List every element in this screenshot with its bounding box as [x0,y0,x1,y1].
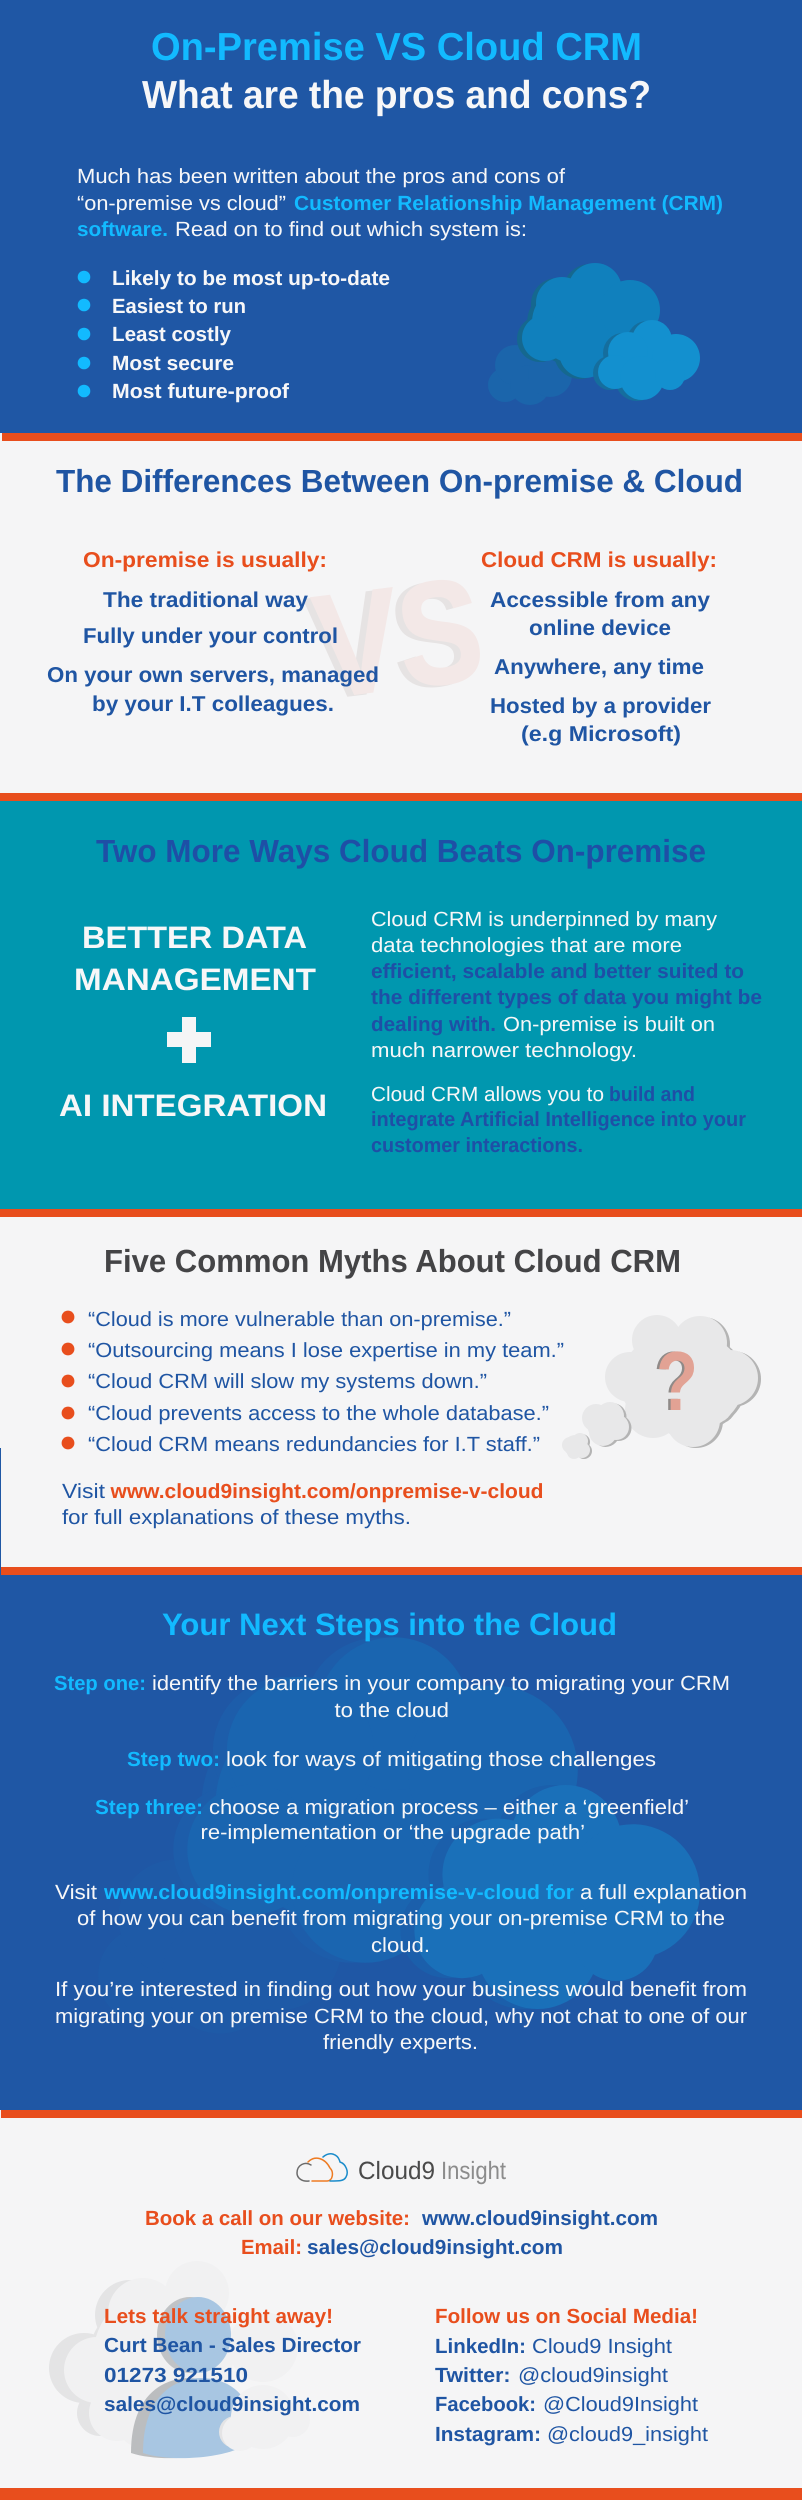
logo: Cloud9 Insight: Insight [441,2157,506,2185]
text: visit for full explanation: a full explanation [580,1881,747,1904]
text: book a call: Email: [241,2236,302,2259]
text: visit link: for full explanations of these myths. [62,1506,411,1529]
text: AI: customer interactions. [371,1134,583,1157]
text: AI: build and [609,1083,695,1106]
text: social media: Follow us on Social Media! [435,2305,698,2328]
bullet list: system qualities: Likely to be most up-to-date [112,267,390,290]
text: social media: @cloud9insight [518,2364,668,2387]
logo: Cloud9 Insight: Cloud9 [358,2157,435,2185]
text: social media: Instagram: [435,2423,541,2446]
bullet list: system qualities: Most future-proof [112,380,289,403]
heading: two more ways: Two More Ways Cloud Beats On-premise [96,833,706,869]
step two: look for ways of mitigating those challenges [226,1748,656,1771]
text: visit link: www.cloud9insight.com/onpremise-v-cloud [109,1480,543,1503]
icon: person with clouds [49,2261,310,2458]
step three: Step three: [95,1796,203,1819]
heading: differences: The Differences Between On-premise & Cloud [56,463,743,499]
column: cloud CRM: (e.g Microsoft) [521,722,681,746]
text: AI [371,1083,746,1157]
icon: thought cloud with question mark: ? [656,1334,698,1428]
column: cloud CRM: Cloud CRM is usually: [481,548,717,572]
column: on-premise: Fully under your control [83,624,338,648]
text: social media: LinkedIn: [435,2335,526,2358]
step three: choose a migration process – either a ‘greenfield’ [209,1796,689,1819]
bullet list: myths: “Cloud is more vulnerable than on-premise.” [88,1308,511,1331]
intro paragraph: Read on to find out which system is: [175,218,527,241]
column: cloud CRM [481,548,717,746]
text: social media: Twitter: [435,2364,510,2387]
text: data technologies: data technologies that are more [371,934,682,957]
column: cloud CRM: Accessible from any [490,588,710,612]
VS watermark: VS [299,548,484,730]
intro paragraph [77,165,723,241]
text: book a call [145,2207,658,2259]
bullet list: myths: “Cloud CRM means redundancies for I.T staff.” [88,1433,540,1456]
text: visit link: Visit [62,1480,105,1503]
bullet list: myths: “Cloud CRM will slow my systems down.” [88,1370,487,1393]
VS watermark: VS [306,547,491,729]
column: cloud CRM: Hosted by a provider [490,694,712,718]
text: social media: @Cloud9Insight [543,2393,698,2416]
text: social media [435,2305,708,2446]
text: visit for full explanation: of how you can benefit from migrating your on-premise CRM to the [77,1907,725,1930]
heading: myths: Five Common Myths About Cloud CRM [104,1243,681,1279]
text: data technologies: the different types of data you might be [371,986,762,1009]
label: better data management [74,920,316,997]
column: on-premise: The traditional way [103,588,308,612]
bullet list: system qualities: Easiest to run [112,295,246,318]
step one: to the cloud [334,1699,449,1722]
icon: plus [167,1017,211,1063]
label: AI integration: AI INTEGRATION [59,1088,327,1123]
background clouds [98,1637,700,2034]
text: social media: @cloud9_insight [547,2423,708,2446]
text: visit for full explanation: Visit [55,1881,97,1904]
panel: contact [0,2110,802,2500]
step one: identify the barriers in your company to migrating your CRM [152,1672,730,1695]
column: on-premise: On your own servers, managed [47,663,379,687]
text: social media: Cloud9 Insight [532,2335,672,2358]
title: What are the pros and cons? [142,74,651,117]
text: chat to experts: migrating your on premise CRM to the cloud, why not chat to one of our [55,2005,747,2028]
label: better data management: MANAGEMENT [74,962,316,997]
bullet list: system qualities [78,267,390,403]
column: cloud CRM: online device [529,616,671,640]
bullet list: system qualities: Least costly [112,323,232,346]
text: direct contact: 01273 921510 [104,2364,248,2387]
icon: blue clouds [488,263,700,405]
text: social media: Facebook: [435,2393,536,2416]
intro paragraph: Customer Relationship Management (CRM) [294,192,723,215]
column: on-premise: On-premise is usually: [83,548,327,572]
panel: myths [0,1217,802,1567]
text: data technologies: dealing with. [371,1013,496,1036]
column: on-premise [47,548,379,716]
step three [95,1796,689,1844]
text: data technologies [371,908,762,1062]
panel: two more ways [0,801,802,1217]
text: visit for full explanation: cloud. [371,1934,430,1957]
text: visit for full explanation: www.cloud9insight.com/onpremise-v-cloud for [103,1881,574,1904]
label: better data management: BETTER DATA [82,920,307,955]
bullet list: myths [62,1308,564,1456]
text: direct contact: Curt Bean - Sales Director [104,2334,361,2357]
panel: next steps [0,1567,802,2110]
text: chat to experts: friendly experts. [323,2031,478,2054]
text: data technologies: much narrower technology. [371,1039,637,1062]
step two: Step two: [127,1748,220,1771]
intro paragraph: Much has been written about the pros and cons of [77,165,565,188]
text: book a call: sales@cloud9insight.com [307,2236,563,2259]
heading: next steps: Your Next Steps into the Cloud [162,1607,617,1642]
text: direct contact: sales@cloud9insight.com [104,2393,360,2416]
column: on-premise: by your I.T colleagues. [92,692,334,716]
text: AI: Cloud CRM allows you to [371,1083,604,1106]
icon: thought cloud with question mark [562,1315,761,1459]
icon: thought cloud with question mark: ? [654,1334,696,1428]
step one [54,1672,730,1722]
text: book a call: Book a call on our website: [145,2207,410,2230]
panel: intro [0,0,802,433]
step three: re-implementation or ‘the upgrade path’ [200,1821,585,1844]
text: data technologies: On-premise is built on [503,1013,715,1036]
bullet list: myths: “Outsourcing means I lose expertise in my team.” [88,1339,564,1362]
intro paragraph: “on-premise vs cloud” [77,192,286,215]
text: direct contact [104,2305,361,2416]
title [142,26,651,117]
column: cloud CRM: Anywhere, any time [494,655,704,679]
text: book a call: www.cloud9insight.com [421,2207,658,2230]
intro paragraph: software. [77,218,168,241]
text: AI: integrate Artificial Intelligence into your [371,1108,746,1131]
logo: Cloud9 Insight [297,2154,506,2185]
bullet list: myths: “Cloud prevents access to the whole database.” [88,1402,549,1425]
text: chat to experts: If you’re interested in finding out how your business would benefit from [55,1978,747,2001]
text: chat to experts [55,1978,747,2054]
bullet list: system qualities: Most secure [112,352,234,375]
step one: Step one: [54,1672,146,1695]
title: On-Premise VS Cloud CRM [151,26,642,69]
text: visit link [62,1480,544,1529]
text: data technologies: efficient, scalable and better suited to [371,960,744,983]
text: visit for full explanation [55,1881,747,1957]
panel: differences [0,433,802,801]
text: data technologies: Cloud CRM is underpinned by many [371,908,718,931]
text: direct contact: Lets talk straight away! [104,2305,333,2328]
